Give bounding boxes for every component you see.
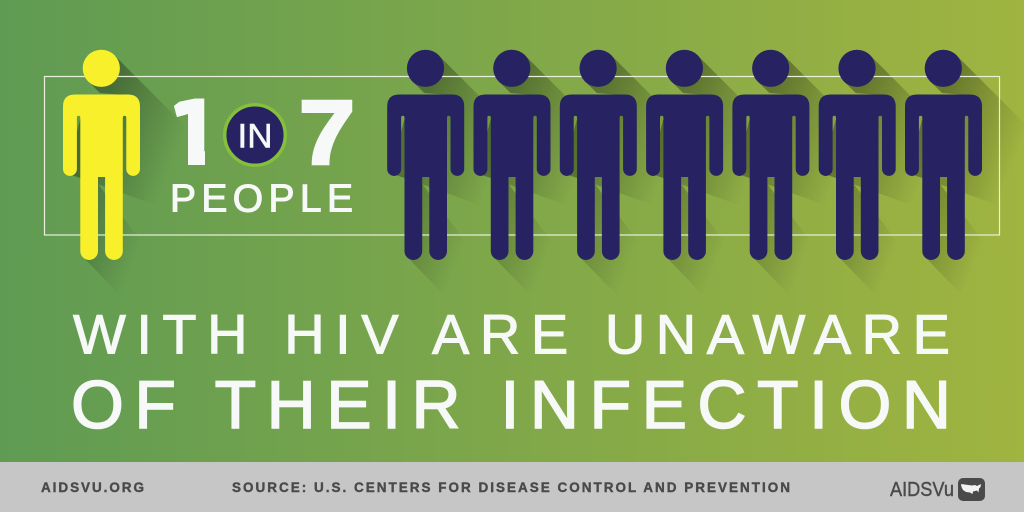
footer bar xyxy=(0,462,1024,512)
numeral 1: 1 xyxy=(170,81,214,188)
badge: IN: IN xyxy=(238,118,272,156)
white outline frame xyxy=(44,76,1000,235)
footer website: AIDSVU.ORG xyxy=(41,480,144,495)
icon: yellow person (the one in seven) xyxy=(63,50,140,260)
footer source: SOURCE: U.S. CENTERS FOR DISEASE CONTROL AND PREVENTION xyxy=(232,480,790,495)
row of seven navy people xyxy=(387,50,982,260)
badge: IN xyxy=(225,105,285,165)
icon: US map badge xyxy=(958,478,985,501)
logo wordmark: AIDSVu xyxy=(890,479,954,501)
numeral 7: 7 xyxy=(299,83,355,184)
statistic: 1 in 7 people xyxy=(172,98,352,212)
headline line 2: OF THEIR INFECTION xyxy=(71,367,951,443)
headline line 1: WITH HIV ARE UNAWARE xyxy=(73,303,950,366)
logo: AIDSVu xyxy=(890,478,985,501)
label: PEOPLE: PEOPLE xyxy=(170,177,353,220)
long cast shadows of the figures xyxy=(66,55,1024,360)
